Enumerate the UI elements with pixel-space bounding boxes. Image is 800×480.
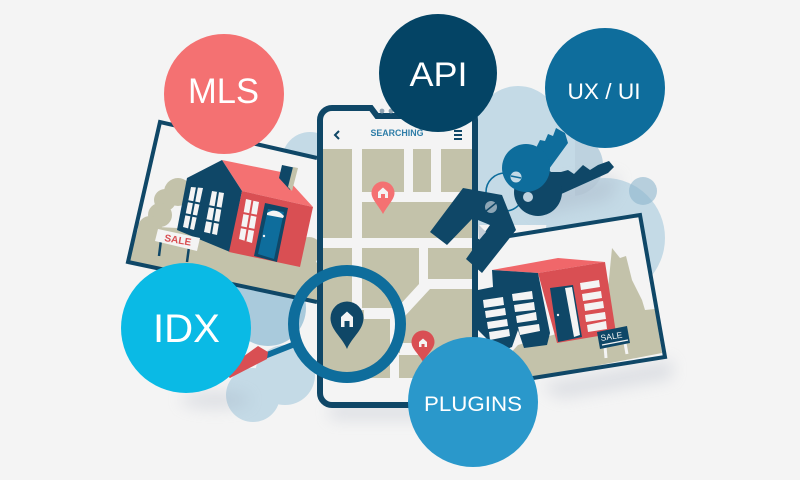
back chevron [335, 131, 339, 139]
menu icon [454, 130, 462, 140]
phone body outline [320, 108, 475, 405]
badge: UX / UI [545, 28, 665, 148]
badge: MLS [164, 34, 284, 154]
notch cover [372, 100, 430, 114]
sale sign: SALE [600, 330, 623, 343]
sale sign [155, 229, 200, 262]
navy windows [183, 187, 224, 235]
screen title: SEARCHING [370, 128, 424, 138]
key tag [430, 188, 516, 273]
badge: API: API [410, 56, 468, 94]
background blobs [226, 86, 665, 422]
badge: PLUGINS: PLUGINS [424, 393, 522, 416]
bushes [138, 178, 322, 280]
card frame [128, 122, 317, 302]
door [254, 203, 288, 262]
badge: PLUGINS [408, 337, 538, 467]
badge: UX / UI: UX / UI [568, 79, 640, 104]
navy key [514, 161, 614, 216]
lens ring [294, 270, 400, 378]
badge: API [379, 14, 497, 132]
badge: IDX [121, 263, 251, 393]
map [323, 149, 472, 378]
magnifying glass [222, 270, 400, 378]
blue key [502, 128, 568, 192]
camera dots [380, 109, 393, 113]
small translucent circle [629, 177, 657, 205]
trees and ground [480, 248, 662, 386]
photo card: left house [128, 122, 322, 302]
soft shadows [180, 175, 672, 419]
smartphone [320, 100, 475, 405]
pin: navy [330, 302, 364, 349]
building roof [492, 258, 605, 273]
badge: IDX: IDX [153, 307, 220, 351]
key ring [486, 173, 524, 211]
photo card: right building [478, 215, 665, 387]
house red front [229, 191, 313, 267]
building navy block [478, 270, 550, 352]
chimney [279, 165, 298, 191]
navy slats [483, 291, 540, 340]
pin: salmon [372, 182, 394, 214]
red slats [580, 280, 607, 332]
badge: MLS: MLS [188, 72, 259, 111]
house navy front [177, 160, 242, 252]
door [550, 285, 582, 342]
sale sign [597, 326, 630, 358]
card frame [478, 215, 665, 387]
red windows [239, 199, 259, 243]
keys [430, 128, 614, 273]
sale sign: SALE [163, 233, 192, 249]
pin: red [412, 331, 434, 362]
handle [262, 344, 295, 357]
ground [128, 226, 317, 302]
house roof [222, 160, 313, 207]
building red front [538, 262, 616, 343]
